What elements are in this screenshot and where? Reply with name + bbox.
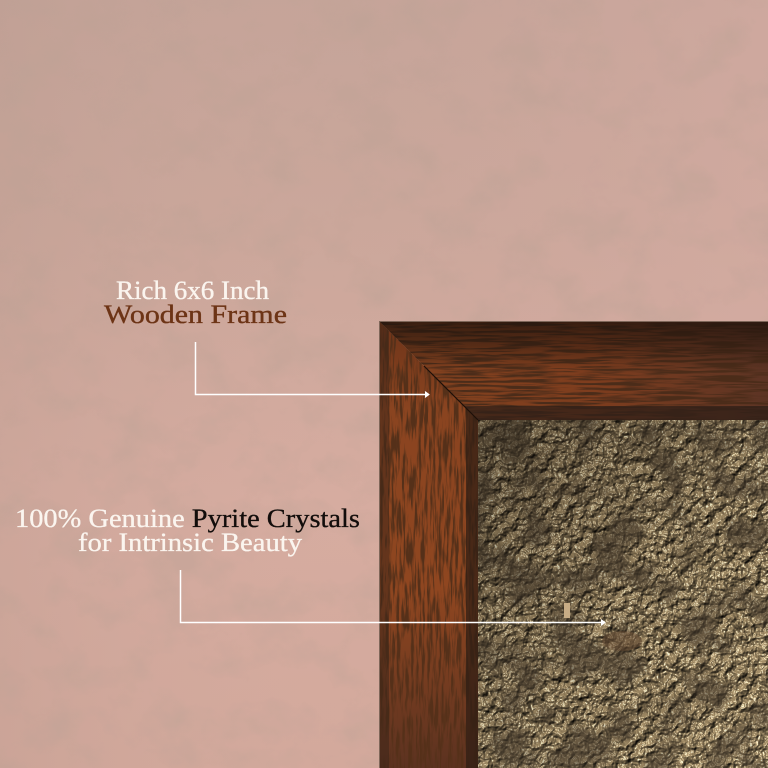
heading: pyrite crystals label: 100% Genuine Pyrite Crystals — [15, 504, 360, 533]
pyrite crystal panel — [478, 420, 768, 768]
heading: wooden frame label — [104, 276, 287, 329]
heading: wooden frame label: Rich 6x6 Inch — [116, 276, 269, 305]
frame: top rail — [379, 321, 768, 420]
heading: pyrite crystals label: for Intrinsic Beauty — [78, 528, 302, 557]
pale crystal fleck — [564, 603, 570, 618]
arrow: to pyrite crystals — [180, 570, 605, 626]
heading: pyrite crystals label — [15, 504, 360, 557]
arrow: to wooden frame — [196, 342, 429, 398]
frame: left rail — [379, 321, 478, 768]
heading: wooden frame label: Wooden Frame — [104, 300, 287, 329]
frame: mitre joint — [424, 366, 478, 420]
wooden frame corner — [379, 321, 768, 768]
frame: outer edge highlight — [380, 322, 768, 768]
brown patch — [602, 631, 642, 651]
